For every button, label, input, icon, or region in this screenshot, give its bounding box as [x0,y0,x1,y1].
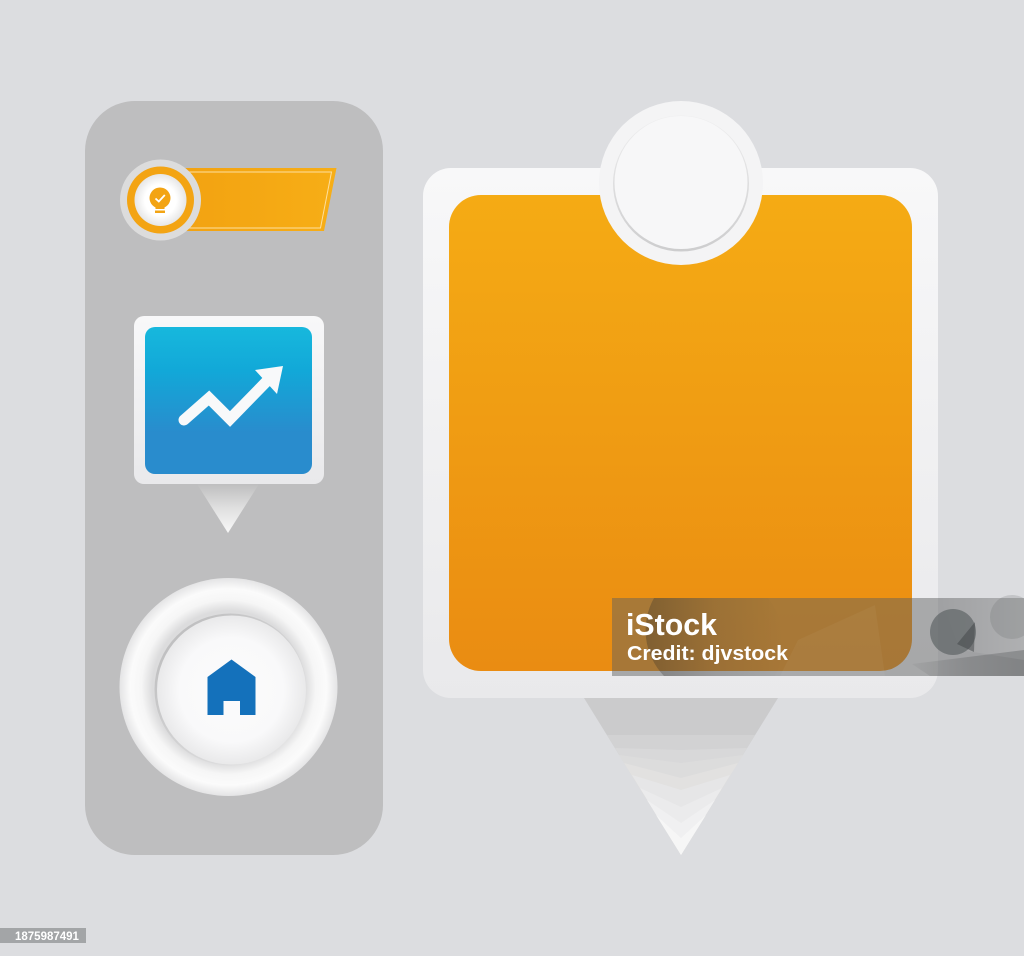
image id tag: 1875987491 [15,931,80,943]
watermark text: iStock: iStock [626,607,718,642]
watermark band [612,595,1024,676]
panel: large orange card [449,195,912,671]
image id tag [0,928,86,943]
icon: house [208,660,256,715]
pointer: small pin [197,484,259,533]
icon: light bulb with check [150,188,170,213]
card: blue growth pin [134,316,324,533]
watermark text: credit: Credit: djvstock [627,643,789,665]
panel: left grey column [85,101,383,855]
panel: large white frame [423,168,938,698]
banner: orange label with bulb badge [120,160,336,240]
badge: empty circle on top of card [599,101,763,265]
icon: rising arrow chart [184,366,283,420]
button: round home [120,578,338,796]
pointer: large pin with chevron fade [584,698,778,855]
